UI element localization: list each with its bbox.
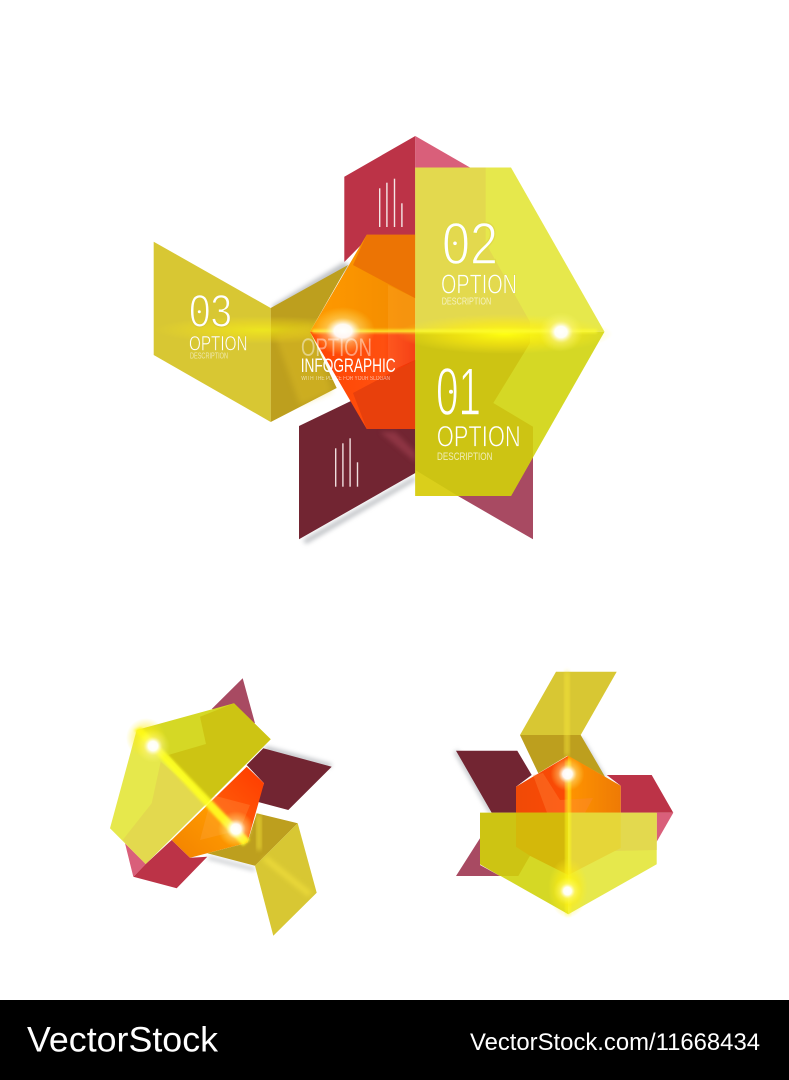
label: option 02: [441, 211, 517, 307]
label: option 01: OPTION: [437, 421, 521, 454]
label: option 03: [189, 286, 248, 361]
panel: bottom maroon ribbon: [299, 400, 533, 539]
panel: large yellow arrow: [415, 168, 604, 496]
shadows: [454, 737, 606, 814]
label: center infographic title: WITH THE PLACE FOR YOUR SLOGAN: [301, 376, 390, 382]
light streak: [126, 718, 254, 847]
shape: maroon band: [247, 748, 332, 810]
light streak: [311, 307, 613, 355]
icon: bottom bars: [335, 438, 358, 487]
label: center infographic title: [301, 334, 396, 382]
label: option 02: 02: [442, 211, 498, 277]
shape: crimson band: [607, 775, 673, 842]
label: option 03: OPTION: [189, 332, 248, 355]
shadows: [208, 746, 332, 871]
panel: top crimson ribbon: [344, 136, 470, 262]
footer logo: VectorStock: [27, 1020, 219, 1060]
panel: option 03 folded ribbon: [154, 242, 370, 422]
shape: gold fold: [207, 813, 317, 936]
shape: yellow arrow: [110, 703, 271, 864]
shape: hexagon: [516, 756, 621, 875]
shape: crimson band: [125, 840, 207, 888]
label: center infographic title: OPTION: [301, 334, 372, 362]
shape: maroon band: [456, 751, 532, 813]
main infographic: [154, 136, 613, 544]
label: option 01: [436, 354, 521, 463]
label: option 02: OPTION: [441, 268, 517, 299]
footer bar: [0, 1000, 789, 1080]
light streak: [548, 757, 588, 918]
label: option 01: 01: [436, 354, 481, 430]
label: center infographic title: INFOGRAPHIC: [301, 355, 396, 377]
label: option 03: 03: [189, 286, 232, 337]
footer url: VectorStock.com/11668434: [470, 1029, 760, 1056]
drop shadows: [272, 262, 415, 544]
shape: pink corner: [456, 838, 500, 876]
shape: top pink corner: [212, 678, 255, 723]
shape: yellow arrow: [480, 813, 657, 914]
small diagram: rotated: [110, 678, 332, 936]
small diagram: upright: [454, 672, 673, 918]
icon: top bars: [379, 179, 403, 227]
label: option 03: DESCRIPTION: [190, 352, 228, 361]
label: option 01: DESCRIPTION: [437, 451, 493, 463]
shape: gold fold: [520, 672, 617, 777]
shape: hexagon: [172, 767, 264, 858]
label: option 02: DESCRIPTION: [442, 296, 491, 307]
central hexagon: [310, 235, 415, 429]
